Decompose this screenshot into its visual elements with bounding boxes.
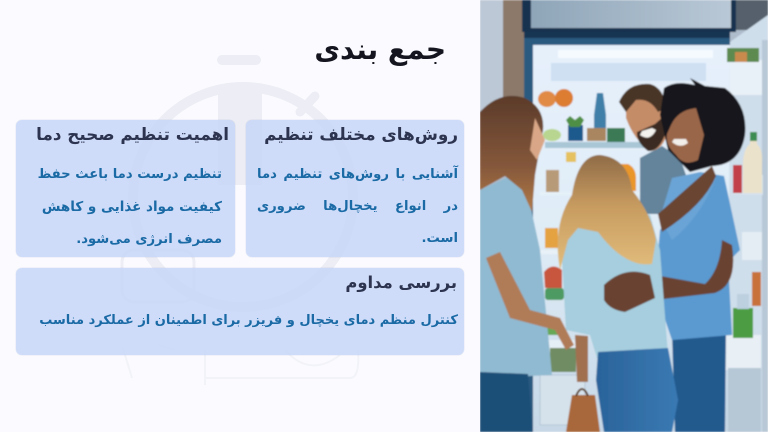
refrigerator body: [524, 32, 733, 432]
person: woman with long hair on left: [480, 96, 574, 432]
text block: different setting methods: [257, 165, 458, 246]
title: جمع بندی: [314, 33, 446, 66]
text block: different setting methods: است.: [422, 231, 458, 246]
heading: regular checking: بررسی مداوم: [345, 273, 457, 292]
person: woman with curly hair: [604, 78, 745, 432]
text block: importance of correct temperature: مصرف انرژی می‌شود.: [76, 232, 222, 247]
person: man smiling: [619, 84, 687, 214]
panel: regular checking: [16, 268, 464, 355]
text block: importance of correct temperature: تنظیم درست دما باعث حفظ: [38, 167, 222, 182]
text block: importance of correct temperature: [38, 167, 222, 247]
text block: different setting methods: در انواع یخچال‌ها ضروری: [257, 199, 458, 214]
text block: regular checking: کنترل منظم دمای یخچال و فریزر برای اطمینان از عملکرد مناسب: [39, 313, 458, 328]
heading: importance of correct temperature: اهمیت تنظیم صحیح دما: [36, 124, 229, 144]
panel: importance of correct temperature: [16, 120, 235, 257]
photo: friends at an open refrigerator: [480, 0, 768, 432]
text block: different setting methods: آشنایی با روش‌های تنظیم دما: [257, 167, 458, 182]
person: woman with blonde hair seen from behind: [558, 155, 678, 432]
fridge contents: fruit, bottles and jars: [538, 89, 762, 338]
background: wall and cabinet: [480, 0, 768, 432]
text block: importance of correct temperature: کیفیت مواد غذایی و کاهش: [42, 199, 222, 215]
watermark: stopwatch logo: [120, 55, 359, 385]
panel: different setting methods: [246, 120, 464, 257]
right door with shelves: [724, 15, 768, 432]
heading: different setting methods: روش‌های مختلف تنظیم: [264, 124, 458, 144]
